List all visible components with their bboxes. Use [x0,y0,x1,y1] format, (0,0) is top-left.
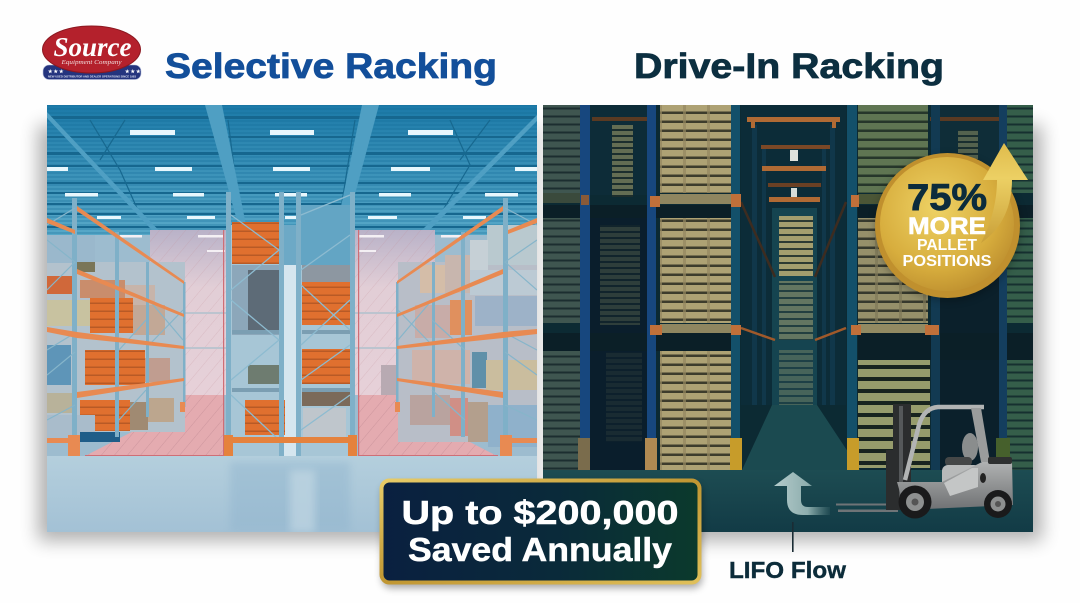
back wall [120,230,465,395]
logo blue band [43,65,141,80]
75%: 75% [907,177,987,218]
coin [875,153,1020,298]
centre racks [224,192,357,456]
LIFO leader line [792,522,794,552]
left rack frames [47,198,186,456]
logo wordmark: Source [54,32,132,62]
forks [836,504,898,512]
POSITIONS: POSITIONS [902,253,992,270]
forklift [836,404,1013,518]
right rack frames [381,198,537,456]
LIFO Flow label: LIFO Flow [729,557,846,583]
callout: savings [382,480,702,588]
cab frame [905,407,984,480]
heading: Selective Racking: Selective Racking [165,46,497,86]
pallet stacks [543,105,1033,470]
callout line 2: Saved Annually [408,532,672,569]
panel: selective racking warehouse [47,105,537,532]
left rack goods [47,262,185,442]
logo tagline: Equipment Company [60,60,122,66]
body [897,462,1013,510]
badge: 75% more pallet positions [875,143,1028,301]
gold arrow [981,143,1028,243]
LIFO flow arrow [774,472,830,515]
logo small print: NEW USED DISTRIBUTOR AND DEALER OPERATIONS SINCE 1983 [48,74,137,78]
central corridor [741,105,860,470]
heading: Drive-In Racking: Drive-In Racking [634,46,944,86]
seat [942,433,978,482]
orange guard rail [224,435,357,456]
mast [886,404,911,510]
floor [543,470,1033,532]
MORE: MORE [908,213,986,240]
logo: Source Equipment Company: ★★★ [125,69,141,75]
logo red oval [42,26,140,73]
back room equipment [381,365,396,395]
right rack goods [398,225,537,447]
logo: Source Equipment Company [42,26,141,80]
PALLET: PALLET [917,237,978,254]
callout line 1: Up to $200,000 [402,495,678,532]
panel shadows [38,125,1042,541]
concrete floor [47,456,537,532]
shelf beams and uprights [543,105,1033,470]
panel: drive-in racking warehouse [543,105,1033,532]
side bays [590,105,1000,470]
pink floor zones [85,230,498,456]
front wheel [898,486,932,518]
ceiling [47,105,537,235]
ceiling lights [47,130,537,219]
logo stars: ★★★ [48,69,64,75]
rear wheel [984,490,1012,518]
